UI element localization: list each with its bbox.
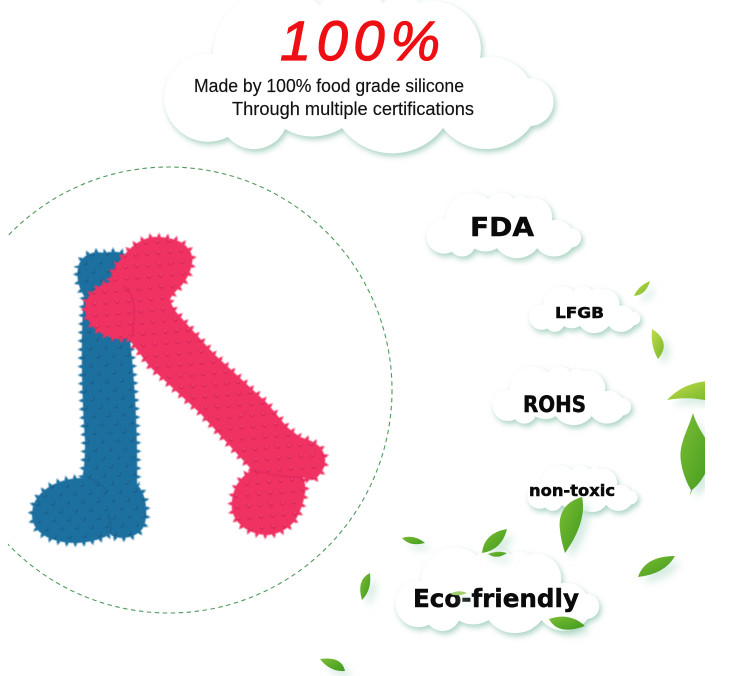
text block: material description: Made by 100% food grade silicone — [194, 75, 464, 96]
heading: 100%: 100% — [280, 9, 440, 72]
leaf 11 — [549, 617, 585, 630]
leaf 4: large leaf — [680, 413, 712, 496]
cloud: LFGB — [529, 286, 640, 333]
leaves — [320, 281, 712, 671]
leaf 3 — [667, 381, 710, 401]
leaf 2 — [652, 329, 664, 359]
label: Eco-friendly: Eco-friendly — [413, 584, 579, 613]
label: non-toxic: non-toxic — [529, 481, 615, 500]
leaf 7 — [488, 552, 507, 557]
cloud: FDA — [426, 193, 581, 258]
cloud: Eco-friendly — [396, 547, 599, 633]
leaf 10 — [450, 591, 467, 595]
text block: material description — [194, 75, 474, 119]
label: LFGB: LFGB — [555, 304, 604, 322]
dashed circle — [0, 167, 392, 613]
text block: material description: Through multiple certifications — [232, 98, 474, 119]
leaf 8 — [402, 537, 425, 544]
pink bone toy — [85, 237, 325, 535]
label: FDA: FDA — [470, 213, 534, 243]
cloud: non-toxic — [527, 465, 638, 512]
cloud: ROHS — [492, 366, 631, 425]
main cloud — [164, 0, 554, 153]
leaf 5 — [560, 497, 583, 553]
leaf 13 — [320, 658, 345, 671]
leaf 1 — [634, 281, 650, 296]
leaf 6 — [482, 529, 507, 553]
label: ROHS: ROHS — [523, 393, 586, 418]
leaf 9 — [360, 573, 370, 600]
blue bone toy — [32, 252, 146, 543]
leaf 12 — [638, 556, 675, 577]
